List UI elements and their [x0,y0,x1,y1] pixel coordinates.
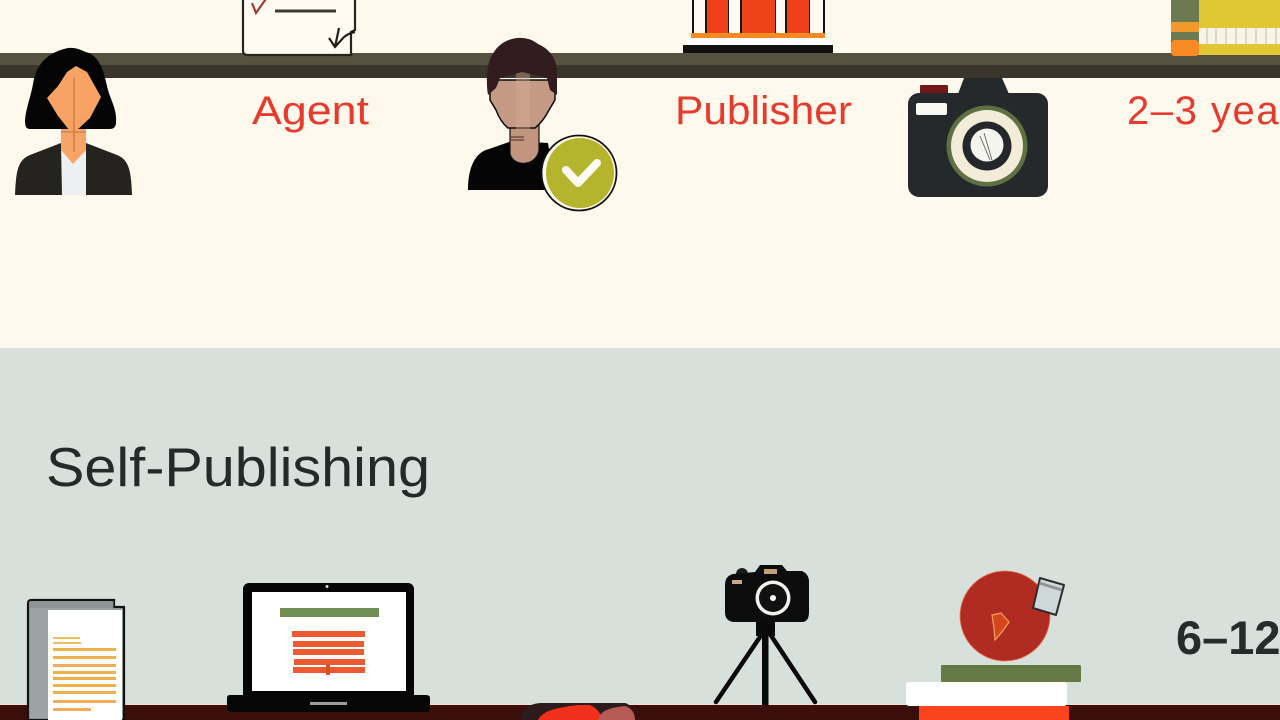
icon: publishing building [683,0,833,53]
icon: woman author [15,48,132,195]
label: agent: Agent [252,89,369,133]
heading: self-publishing: Self-Publishing [46,436,430,498]
icon: camera on tripod [716,565,815,705]
icon: laptop [227,583,430,712]
bottom shelf [0,704,1280,720]
icon: stacked yellow book [1171,0,1280,56]
icon: manuscript [28,600,124,720]
icon: green check badge [542,136,616,210]
icon: approved author [468,38,616,210]
label: publisher: Publisher [675,89,852,133]
icon: signed contract [243,0,355,55]
top shelf [0,53,1280,78]
icon: camera on shelf [908,78,1048,197]
icon: red object at shelf [520,703,636,720]
icon: book stack with promo disc [906,571,1081,720]
